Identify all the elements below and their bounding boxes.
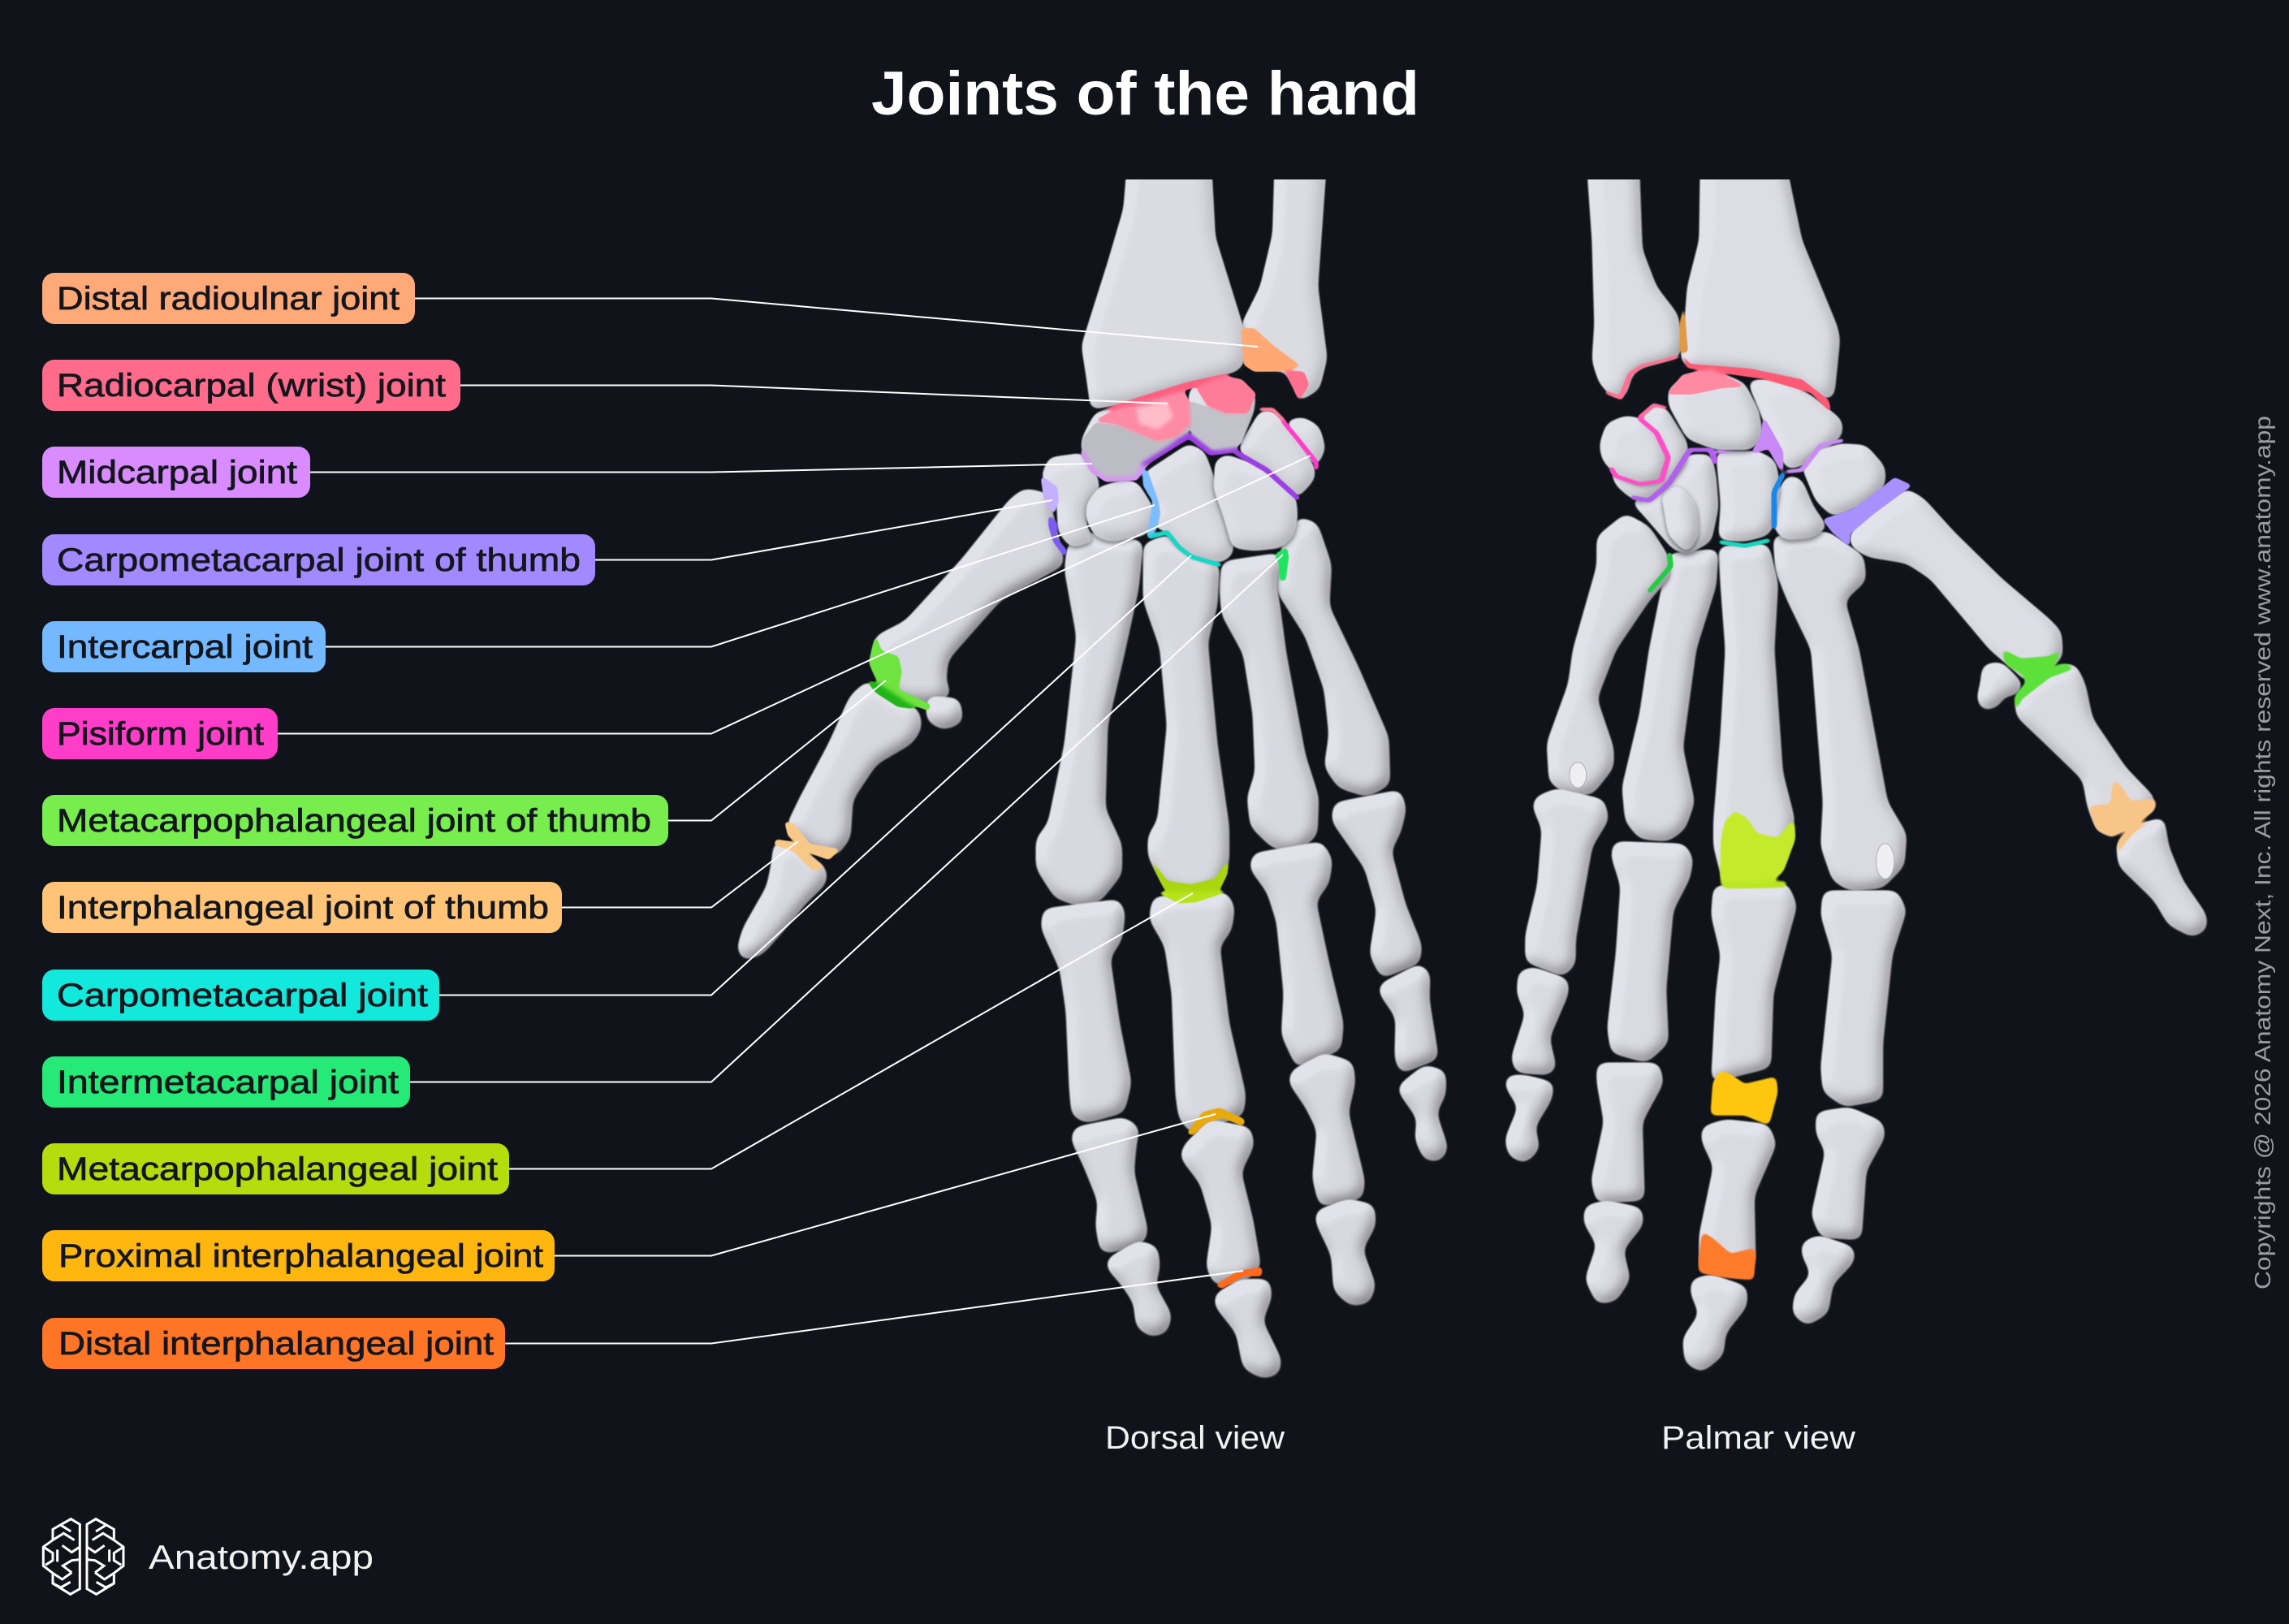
dorsal view skeleton [737, 150, 1449, 1379]
joints: wrist and carpal highlights, dorsal [1041, 329, 1316, 581]
label: Metacarpophalangeal joint of thumb: Metacarpophalangeal joint of thumb [57, 803, 651, 839]
label: Interphalangeal joint of thumb: Interphalangeal joint of thumb [57, 890, 549, 926]
joints: finger and thumb highlights, palmar [1699, 650, 2162, 1279]
label: Interphalangeal joint of thumb [42, 882, 562, 933]
caption: Dorsal view: Dorsal view [1105, 1420, 1285, 1456]
label: Intercarpal joint [42, 621, 326, 672]
label: Carpometacarpal joint [42, 970, 439, 1021]
leader line: metacarpophalangeal [509, 893, 1193, 1169]
leader line: interphalangeal of thumb [562, 841, 798, 908]
copyright: Copyrights @ 2026 Anatomy Next, Inc. All rights reserved www.anatomy.app [2250, 416, 2275, 1289]
carpals, palmar [1600, 369, 1885, 555]
leader line: distal interphalangeal [505, 1271, 1243, 1343]
label: Proximal interphalangeal joint [42, 1230, 555, 1281]
caption: Palmar view: Palmar view [1661, 1420, 1855, 1456]
leader line: pisiform [278, 456, 1311, 734]
leader line: carpometacarpal of thumb [595, 500, 1052, 560]
label: Midcarpal joint [42, 447, 310, 498]
leader line: metacarpophalangeal of thumb [668, 680, 886, 820]
label: Carpometacarpal joint of thumb: Carpometacarpal joint of thumb [57, 542, 581, 578]
label: Carpometacarpal joint: Carpometacarpal joint [57, 978, 428, 1013]
leader line: radiocarpal [460, 385, 1168, 404]
leader line: midcarpal [310, 464, 1092, 473]
label: Pisiform joint [42, 708, 278, 759]
leader line: intermetacarpal [410, 555, 1283, 1082]
icon: brain logo [43, 1519, 123, 1594]
carpals, dorsal [1041, 377, 1325, 564]
label: Distal interphalangeal joint [42, 1318, 505, 1369]
label: Midcarpal joint: Midcarpal joint [57, 455, 297, 490]
label: Radiocarpal (wrist) joint [42, 360, 460, 411]
metacarpals and phalanges, dorsal [737, 488, 1449, 1379]
title: Joints of the hand [871, 59, 1419, 128]
label: Carpometacarpal joint of thumb [42, 534, 595, 585]
leader line: intercarpal [326, 505, 1155, 646]
palmar view skeleton [1505, 144, 2207, 1373]
logo text: Anatomy.app [149, 1538, 374, 1576]
label: Metacarpophalangeal joint [42, 1143, 509, 1194]
leader line: distal radioulnar [415, 299, 1258, 347]
metacarpals and phalanges, palmar [1505, 513, 2207, 1373]
label: Metacarpophalangeal joint of thumb [42, 795, 668, 846]
joints: wrist and carpal highlights, palmar [1606, 305, 1911, 591]
radius and ulna, palmar [1587, 179, 1841, 400]
label: Intermetacarpal joint [42, 1056, 410, 1108]
joints: thumb and finger highlights, dorsal [774, 636, 1262, 1288]
label: Metacarpophalangeal joint: Metacarpophalangeal joint [57, 1151, 498, 1187]
label: Distal interphalangeal joint: Distal interphalangeal joint [58, 1326, 494, 1362]
radius and ulna, dorsal [1082, 150, 1328, 409]
label: Radiocarpal (wrist) joint: Radiocarpal (wrist) joint [57, 368, 446, 404]
thumb metacarpal, palmar [1850, 489, 2062, 681]
sesamoid knobs, palmar [1570, 762, 1894, 879]
label: Distal radioulnar joint: Distal radioulnar joint [57, 281, 399, 317]
label: Distal radioulnar joint [42, 273, 415, 324]
label: Intermetacarpal joint: Intermetacarpal joint [57, 1065, 399, 1100]
label: Pisiform joint: Pisiform joint [57, 716, 264, 752]
label: Intercarpal joint: Intercarpal joint [57, 629, 313, 665]
leader line: carpometacarpal [439, 555, 1191, 996]
label: Proximal interphalangeal joint: Proximal interphalangeal joint [58, 1238, 543, 1274]
leader line: proximal interphalangeal [555, 1114, 1216, 1255]
